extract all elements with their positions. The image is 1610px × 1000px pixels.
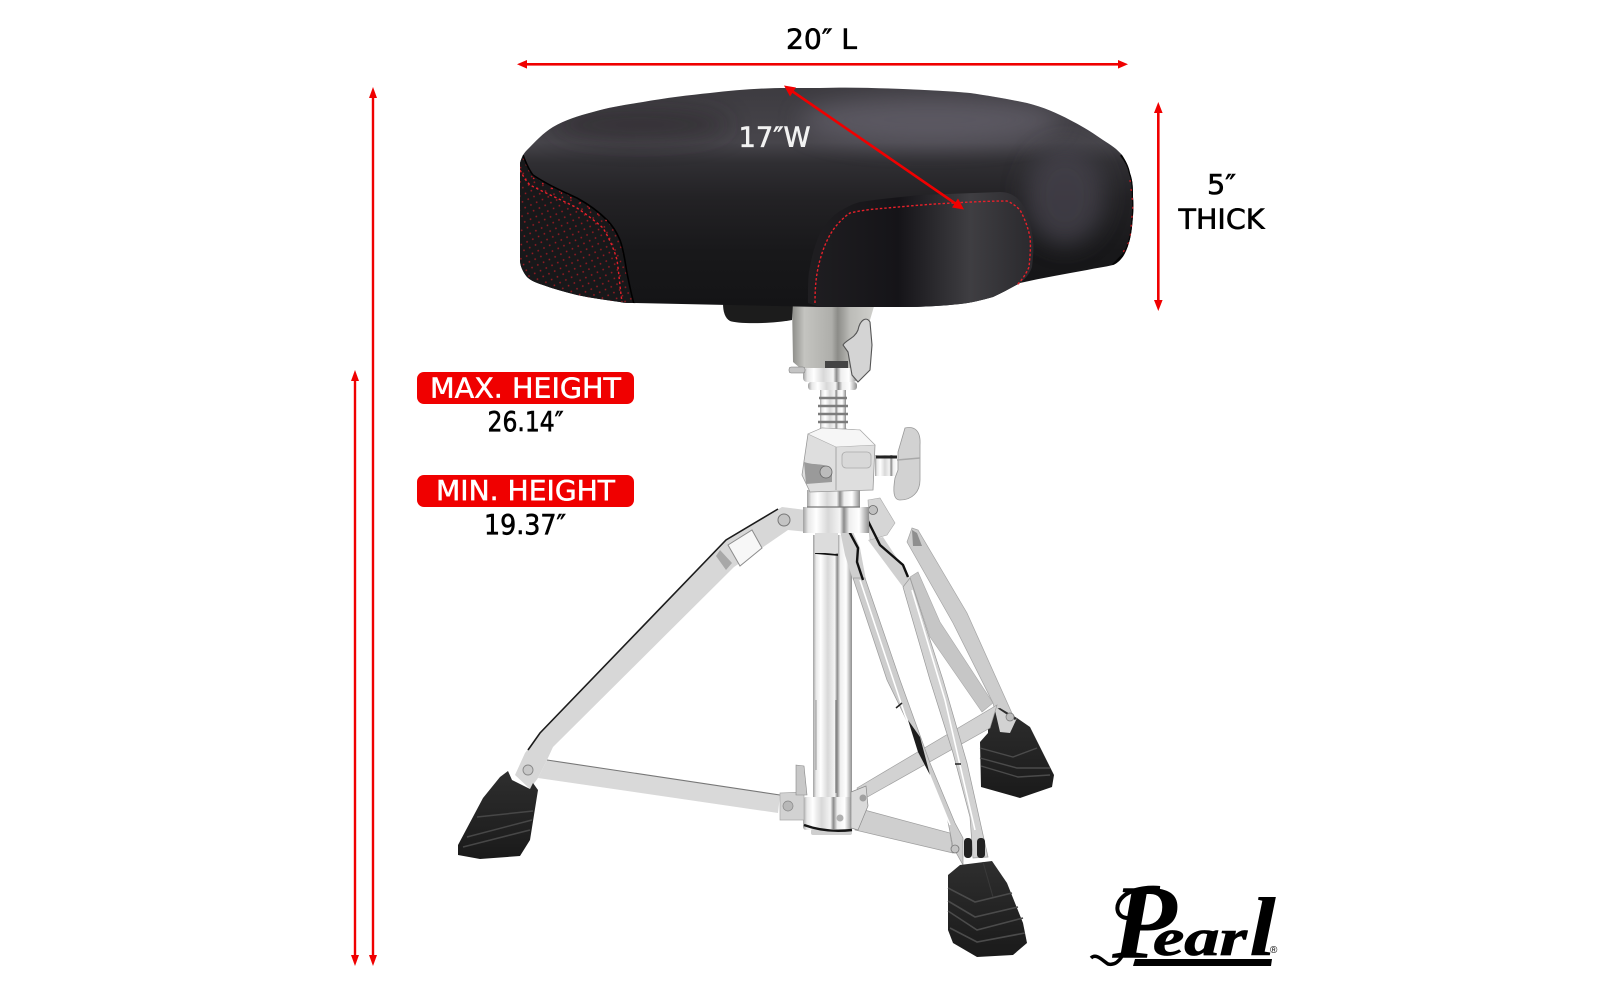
centre pole (813, 535, 852, 805)
pad stitching (815, 201, 1030, 303)
arrow: 5 inch thickness (1154, 102, 1163, 311)
left leg (515, 507, 808, 789)
seat side panel (510, 155, 1133, 304)
badge: min height: MIN. HEIGHT (436, 475, 615, 507)
clamp block (802, 428, 875, 492)
left foot (458, 771, 538, 859)
rear leg and inner strut (907, 528, 1015, 732)
logo: Pearl: ® (1270, 945, 1278, 956)
height adjustment hub (803, 490, 869, 553)
base collar (780, 765, 868, 835)
logo: Pearl (1091, 864, 1278, 981)
front foot (948, 861, 1027, 957)
rear foot (980, 706, 1054, 798)
label: 17 W: 17″W (738, 122, 810, 154)
thread spring (818, 390, 848, 440)
value: min height: 19.37″ (484, 509, 566, 541)
front struts (836, 498, 988, 865)
arrow: 17 inch width (784, 86, 964, 210)
label: 5 thick (1177, 169, 1265, 236)
label: 5 thick: 5″ (1207, 169, 1236, 201)
arrow: max height (369, 87, 377, 966)
logo: Pearl: l (1249, 881, 1277, 974)
seat highlights (550, 96, 1105, 245)
front cross brace (855, 808, 953, 853)
logo: Pearl: P (1111, 864, 1178, 981)
rear cross brace (857, 705, 997, 800)
arrow: 20 inch length (517, 60, 1128, 69)
logo: Pearl: ear (1153, 910, 1248, 967)
label: 5 thick: THICK (1177, 204, 1265, 236)
arrow: min height (351, 370, 359, 966)
seat cushion (510, 88, 1133, 307)
seat casting (789, 303, 875, 390)
front seat pad (808, 192, 1033, 307)
seat body (520, 88, 1133, 307)
value: max height: 26.14″ (488, 406, 564, 438)
badge: max height: MAX. HEIGHT (430, 372, 621, 404)
left cross brace (538, 760, 780, 813)
wing bolt (875, 428, 920, 500)
label: 20 L: 20″ L (786, 24, 858, 56)
seat knob (723, 303, 793, 323)
